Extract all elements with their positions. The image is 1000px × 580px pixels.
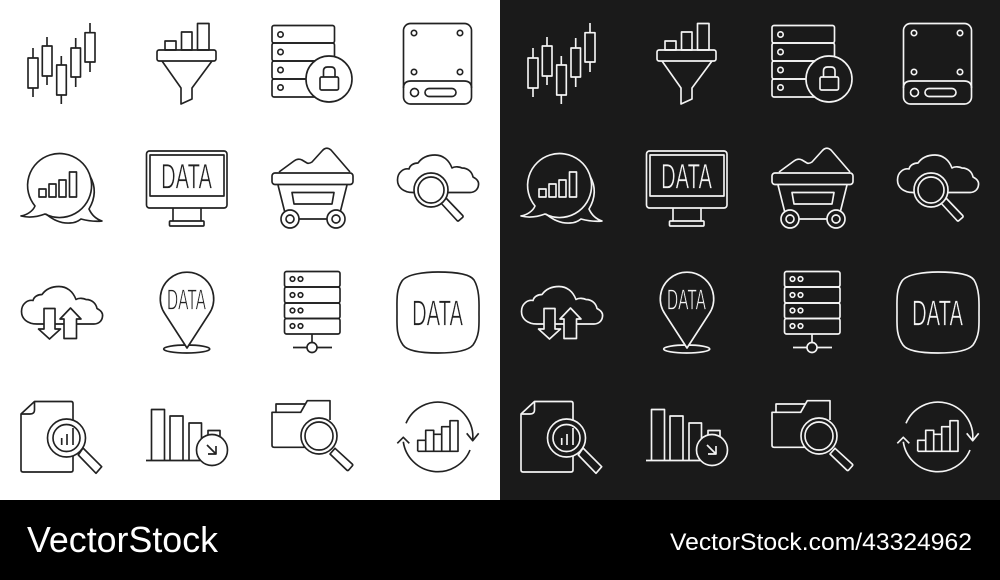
icon: data badge: DATA: [912, 292, 963, 334]
icon: mine cart: [272, 148, 353, 228]
panel: light icon set: [21, 23, 479, 473]
panel: footer bar: [0, 500, 1000, 580]
icon: data location pin: DATA: [167, 284, 206, 316]
icon: folder search: [272, 401, 353, 470]
icon: data monitor: [146, 151, 227, 226]
icon: cloud upload and download: [22, 286, 103, 339]
icon: candlestick chart: [528, 23, 595, 104]
panel: dark background: [500, 0, 1000, 500]
icon: mine cart: [772, 148, 853, 228]
icon: falling bar chart with timer: [146, 410, 228, 466]
icon: data badge: DATA: [412, 292, 463, 334]
icon: data funnel: [157, 24, 216, 104]
icon: data badge: [397, 272, 479, 353]
icon: data monitor: [646, 151, 727, 226]
icon: folder search: [772, 401, 853, 470]
panel: white background: [0, 0, 500, 500]
icon: hard drive: [904, 24, 972, 104]
icon: data location pin: [160, 272, 214, 353]
icon: network server: [284, 272, 340, 352]
icon: network server: [784, 272, 840, 352]
icon: document analysis: [521, 402, 602, 473]
icon: refresh chart: [397, 402, 479, 472]
icon: data monitor: DATA: [661, 158, 712, 196]
panel: dark icon set: [521, 23, 979, 473]
icon: data location pin: DATA: [667, 284, 706, 316]
icon: document analysis: [21, 402, 102, 473]
icon: candlestick chart: [28, 23, 95, 104]
icon: data location pin: [660, 272, 714, 353]
icon: cloud upload and download: [522, 286, 603, 339]
icon: speech bubbles with bars: [21, 154, 102, 223]
icon: falling bar chart with timer: [646, 410, 728, 466]
icon: data monitor: DATA: [161, 158, 212, 196]
icon: data badge: [897, 272, 979, 353]
icon: data funnel: [657, 24, 716, 104]
icon: cloud search: [898, 155, 979, 221]
image id: VectorStock.com/43324962: [670, 529, 972, 556]
icon: server with lock: [272, 26, 352, 102]
icon: hard drive: [404, 24, 472, 104]
icon: server with lock: [772, 26, 852, 102]
brand wordmark: VectorStock: [27, 519, 219, 560]
icon: cloud search: [398, 155, 479, 221]
icon: refresh chart: [897, 402, 979, 472]
icon: speech bubbles with bars: [521, 154, 602, 223]
